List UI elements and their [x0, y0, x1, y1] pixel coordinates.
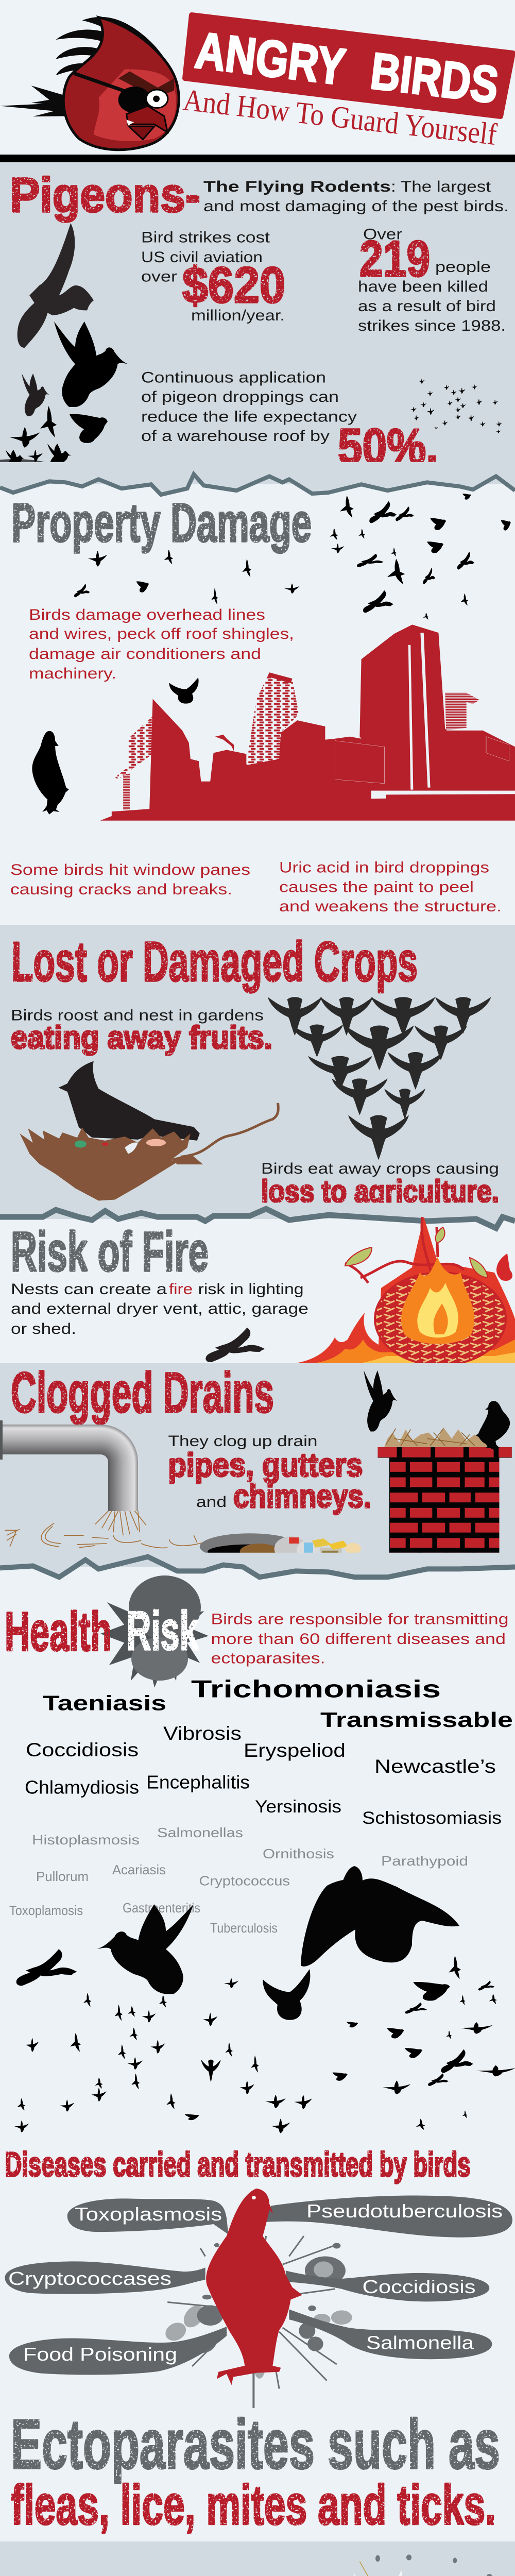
word cloud: diseases: Trichomoniasis — [191, 1675, 441, 1702]
text: loss to agriculture — [261, 1160, 499, 1209]
text: uric acid: Uric acid in bird droppings — [279, 859, 489, 876]
text: window panes — [10, 861, 250, 898]
text: pipes gutters chimneys: pipes, gutters — [168, 1447, 363, 1484]
text: eating away fruits: Birds roost and nest in gardens — [11, 1007, 264, 1024]
callout labels: Coccidiosis — [363, 2276, 476, 2297]
text: diseases intro: more than 60 different diseases and — [211, 1631, 506, 1648]
callout labels: Food Poisoning — [23, 2344, 177, 2365]
black divider bar — [0, 155, 515, 162]
text: nests fire risk: risk in lighting — [198, 1281, 304, 1298]
stat: 620 million: US civil aviation — [141, 249, 263, 266]
heading: Risk of Fire: Risk of Fire — [11, 1221, 209, 1283]
panel: property damage — [10, 493, 515, 915]
stat: 620 million — [141, 229, 285, 324]
panel: lost or damaged crops — [0, 925, 515, 1219]
panel: risk of fire — [11, 1217, 515, 1365]
icon: engraved bird flock triangle — [268, 997, 491, 1160]
stat: 620 million: million/year. — [191, 307, 285, 324]
icon: crested bird on nest — [20, 1061, 278, 1201]
word cloud: diseases: Pullorum — [36, 1869, 89, 1884]
callout blobs — [5, 2195, 512, 2375]
text: overhead lines — [29, 606, 294, 682]
word cloud: diseases: Newcastle’s — [374, 1756, 496, 1777]
callout labels: Cryptococcases — [8, 2268, 171, 2289]
word cloud: diseases: Gastroenteritis — [123, 1900, 200, 1916]
stat: 219 people — [358, 226, 506, 334]
panel: food contamination — [0, 2541, 515, 2576]
debris hair from pipe — [5, 1511, 203, 1548]
word cloud: diseases: Toxoplamosis — [9, 1903, 83, 1918]
intro text: : The largest — [391, 178, 491, 195]
panel: clogged drains — [0, 1361, 515, 1567]
heading: Property Damage: Property Damage — [11, 493, 312, 553]
icon: large spread pigeon — [301, 1866, 459, 1967]
stat: 219 people: strikes since 1988. — [358, 317, 506, 334]
text: diseases intro: ectoparasites. — [211, 1650, 325, 1667]
icon: pigeon on chimney — [475, 1401, 510, 1450]
heading: Clogged Drains: Clogged Drains — [11, 1361, 274, 1425]
text: overhead lines: damage air conditioners and — [29, 646, 261, 663]
callout labels: Toxoplasmosis — [75, 2204, 222, 2225]
icon: dark bird — [18, 223, 94, 348]
callout labels: Salmonella — [366, 2332, 474, 2353]
text: nests fire risk: fire — [169, 1281, 193, 1298]
stat: 219 people: people — [435, 259, 491, 276]
word cloud: diseases: Transmissable — [320, 1708, 513, 1732]
text: pipes gutters chimneys: They clog up drain — [168, 1433, 317, 1450]
icon: bird near fire — [205, 1328, 265, 1362]
text: uric acid: causes the paint to peel — [279, 879, 474, 895]
stat: 219 people: Over — [363, 226, 402, 243]
small flock — [410, 379, 502, 433]
text: window panes: Some birds hit window panes — [10, 861, 250, 878]
word cloud: diseases: Acariasis — [112, 1862, 166, 1877]
flock of birds over diseases — [14, 1904, 515, 2133]
stat: 50 percent: of pigeon droppings can — [141, 388, 339, 405]
stat: 50 percent: Continuous application — [141, 369, 326, 386]
red city skyline — [100, 624, 515, 821]
word cloud: diseases: Encephalitis — [146, 1772, 250, 1793]
icon: red pigeon — [206, 2189, 302, 2385]
stat: 50 percent: of a warehouse roof by — [141, 428, 330, 445]
stat: 219 people: have been killed — [358, 278, 488, 295]
ink splatter around red bird — [162, 2236, 352, 2408]
torn edge: pigeons to property — [0, 462, 515, 495]
stat: 50 percent — [141, 369, 438, 474]
word cloud: diseases: Yersinosis — [255, 1797, 341, 1817]
icon: bird above city — [169, 677, 199, 704]
ink splatter behind risk — [100, 1575, 209, 1688]
text: pipes gutters chimneys — [168, 1433, 371, 1515]
text: nests fire risk — [11, 1281, 308, 1337]
heading: Pigeons: Pigeons- — [10, 168, 200, 223]
panel: pigeons — [0, 162, 515, 484]
title: Angry Birds: ANGRY — [192, 21, 349, 96]
icon: angry red bird — [0, 17, 179, 150]
stat: 620 million: $620 — [182, 257, 285, 313]
heading: ectoparasites — [11, 2405, 500, 2537]
heading: Health Risk: Risk — [127, 1600, 199, 1662]
intro text — [203, 178, 509, 215]
icon: clogged manhole with trash — [200, 1533, 361, 1562]
text: diseases intro: Birds are responsible for transmitting — [211, 1611, 509, 1628]
icon: chimney — [377, 1428, 512, 1563]
text: uric acid — [279, 859, 502, 915]
word cloud: diseases: Ornithosis — [263, 1846, 334, 1861]
flock of birds — [74, 494, 511, 620]
word cloud: diseases: Chlamydiosis — [25, 1777, 139, 1798]
title banner — [185, 15, 513, 116]
text: overhead lines: machinery. — [29, 665, 116, 682]
word cloud: diseases — [9, 1675, 513, 1936]
text: pipes gutters chimneys: chimneys. — [233, 1478, 371, 1515]
torn edge: crops to fire — [0, 1202, 515, 1228]
word cloud: diseases: Tuberculosis — [210, 1920, 278, 1936]
text: overhead lines: Birds damage overhead lines — [29, 606, 265, 623]
text: eating away fruits — [11, 1007, 272, 1056]
word cloud: diseases: Schistosomiasis — [362, 1808, 502, 1828]
intro text: The Flying Rodents — [203, 178, 391, 195]
stat: 50 percent: reduce the life expectancy — [141, 408, 357, 426]
icon: standing pigeon — [32, 731, 69, 815]
stat: 50 percent: 50%. — [338, 418, 438, 474]
word cloud: diseases: Vibrosis — [163, 1723, 242, 1744]
drain pipe — [0, 1420, 138, 1511]
stat: 219 people: as a result of bird — [358, 298, 496, 315]
text: diseases intro — [211, 1611, 509, 1667]
icon: burning nest — [296, 1217, 515, 1365]
text: loss to agriculture: Birds eat away crops causing — [261, 1160, 499, 1177]
text: uric acid: and weakens the structure. — [279, 898, 502, 915]
text: overhead lines: and wires, peck off roof shingles, — [29, 625, 294, 642]
word cloud: diseases: Taeniasis — [43, 1691, 166, 1715]
birds rising from hole — [0, 321, 128, 484]
torn edge: drains to health — [0, 1553, 515, 1577]
text: nests fire risk: and external dryer vent, attic, garage — [11, 1300, 308, 1317]
text: nests fire risk: or shed. — [11, 1320, 76, 1337]
stat: 620 million: Bird strikes cost — [141, 229, 270, 246]
callout labels: Pseudotuberculosis — [306, 2200, 503, 2222]
text: window panes: causing cracks and breaks. — [10, 881, 232, 898]
stat: 620 million: over — [141, 268, 177, 285]
stat: 219 people: 219 — [359, 230, 430, 287]
word cloud: diseases: Cryptococcus — [199, 1873, 290, 1889]
text: nests fire risk: Nests can create a — [11, 1281, 167, 1298]
text: eating away fruits: eating away fruits. — [11, 1020, 272, 1056]
intro text: and most damaging of the pest birds. — [203, 198, 509, 215]
word cloud: diseases: Parathypoid — [381, 1853, 468, 1869]
icon: bread and wheat with splatter — [301, 2554, 508, 2576]
word cloud: diseases: Coccidiosis — [26, 1739, 139, 1760]
text: pipes gutters chimneys: and — [196, 1494, 227, 1511]
word cloud: diseases: Salmonellas — [157, 1825, 243, 1840]
panel: health risk — [5, 1575, 515, 2537]
heading: Health Risk: Health — [5, 1601, 112, 1663]
title: Angry Birds — [192, 21, 501, 114]
callout labels — [8, 2200, 503, 2365]
word cloud: diseases: Eryspeliod — [244, 1740, 346, 1761]
panel: header — [0, 0, 515, 155]
word cloud: diseases: Histoplasmosis — [32, 1832, 140, 1848]
icon: pigeon above chimney — [364, 1370, 398, 1432]
